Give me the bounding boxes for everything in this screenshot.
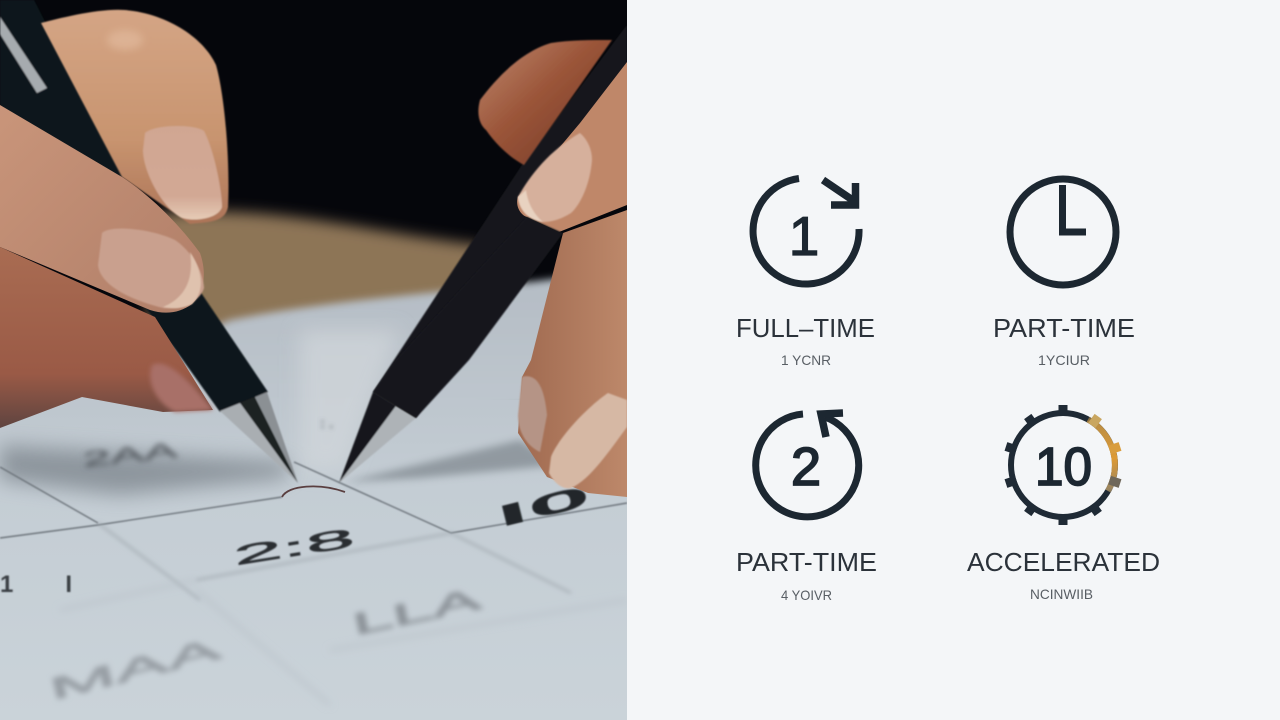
- sublabel: 4 YOIVR: [781, 587, 832, 603]
- icon: circular arrow with 2: 2: [791, 437, 821, 497]
- item: full-time 1 year: [736, 178, 875, 368]
- right hand: lower palm and nails: [518, 210, 627, 497]
- front nail: [549, 393, 627, 488]
- item: accelerated: [967, 405, 1160, 602]
- item: part-time 1 year: [993, 179, 1135, 368]
- icon: gear dial with 10: [1005, 405, 1121, 525]
- dark backdrop: [0, 0, 627, 349]
- item: part-time 4 year: [736, 413, 877, 603]
- calendar paper: LLA: [350, 583, 484, 642]
- fingernail: [143, 126, 222, 220]
- right hand: gripping finger: [517, 62, 627, 232]
- icon: circular arrow with 2: [756, 413, 859, 517]
- sublabel: 1YCIUR: [1038, 352, 1090, 368]
- side nail: [518, 376, 547, 452]
- fingernail: [98, 229, 204, 308]
- label: part-time: PART-TIME: [993, 313, 1135, 343]
- calendar paper: 1 I: [0, 571, 72, 598]
- icon: circular arrow with 1: [753, 178, 859, 284]
- label: full-time: FULL–TIME: [736, 313, 875, 343]
- right pen: [339, 25, 627, 483]
- pen marks at the tips: [282, 486, 345, 497]
- calendar date numbers: 2:8: [231, 523, 357, 571]
- photo: hands marking a calendar with two pens: [0, 0, 627, 720]
- calendar paper: 2AA: [82, 439, 179, 472]
- pen body re-drawn over the finger: [373, 217, 563, 418]
- panel: right background: [627, 0, 1280, 720]
- fingernail: [518, 133, 592, 222]
- label: accelerated: ACCELERATED: [967, 547, 1160, 577]
- icon: circular arrow with 1: 1: [789, 205, 819, 267]
- wooden table: [140, 202, 476, 328]
- left hand: upper finger: [41, 10, 228, 224]
- left pen: [0, 0, 298, 483]
- left hand: index finger: [0, 105, 204, 313]
- right hand: upper finger: [478, 40, 612, 165]
- icon: clock: [1010, 179, 1116, 285]
- left hand: lower finger: [0, 247, 213, 428]
- sublabel: NCINWIIB: [1030, 586, 1093, 602]
- sublabel: 1 YCNR: [781, 352, 831, 368]
- label: part-time: PART-TIME: [736, 547, 877, 577]
- calendar paper: [0, 278, 627, 720]
- calendar paper: MAA: [46, 632, 224, 707]
- fingernail blurred: [150, 363, 213, 412]
- icon: gear dial with 10: 10: [1035, 437, 1092, 497]
- calendar paper: I0: [493, 479, 594, 534]
- calendar paper: : .: [320, 415, 333, 432]
- calendar grid lines: [0, 462, 627, 538]
